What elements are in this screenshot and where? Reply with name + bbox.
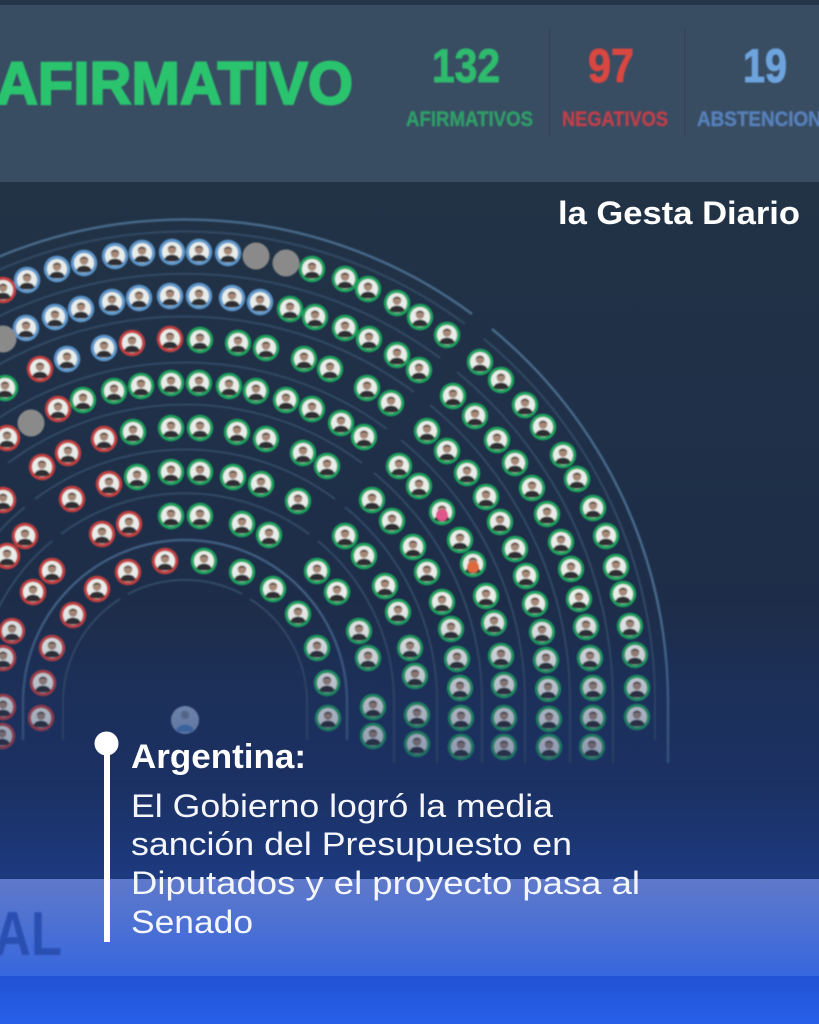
caption body [131,788,640,940]
count: 132 afirmativos: 132 [432,39,500,92]
caption body: sanción del Presupuesto en [131,826,572,862]
pin marker [94,732,118,942]
caption body: Senado [131,904,253,940]
caption [131,738,640,940]
header panel [0,0,819,182]
count: 132 afirmativos: AFIRMATIVOS [406,108,533,131]
bottom fade over seats [0,600,819,780]
brand: la Gesta Diario: la Gesta Diario [558,195,800,231]
seats: ausentes (gray) [0,242,300,436]
count: 19 abstenciones: 19 [743,39,787,92]
count: 97 negativos: NEGATIVOS [562,108,668,131]
header texts [0,39,819,131]
lower band [0,879,819,1024]
caption body: Diputados y el proyecto pasa al [131,865,640,901]
seat: presidencia [171,706,199,734]
seats: negativos (red) [0,277,183,749]
count: 97 negativos: 97 [588,39,634,92]
hemicycle seat dividers [0,219,668,763]
caption heading: Argentina: [131,738,306,776]
count: 97 negativos [562,39,668,131]
count: 132 afirmativos [406,39,533,131]
seats: abstenciones (blue) [13,239,273,372]
result: afirmativo: AFIRMATIVO [0,50,353,117]
hemicycle seats [0,239,650,760]
seats: afirmativos (green) [0,256,650,760]
count: 19 abstenciones [697,39,819,131]
caption body: El Gobierno logró la media [131,788,553,824]
